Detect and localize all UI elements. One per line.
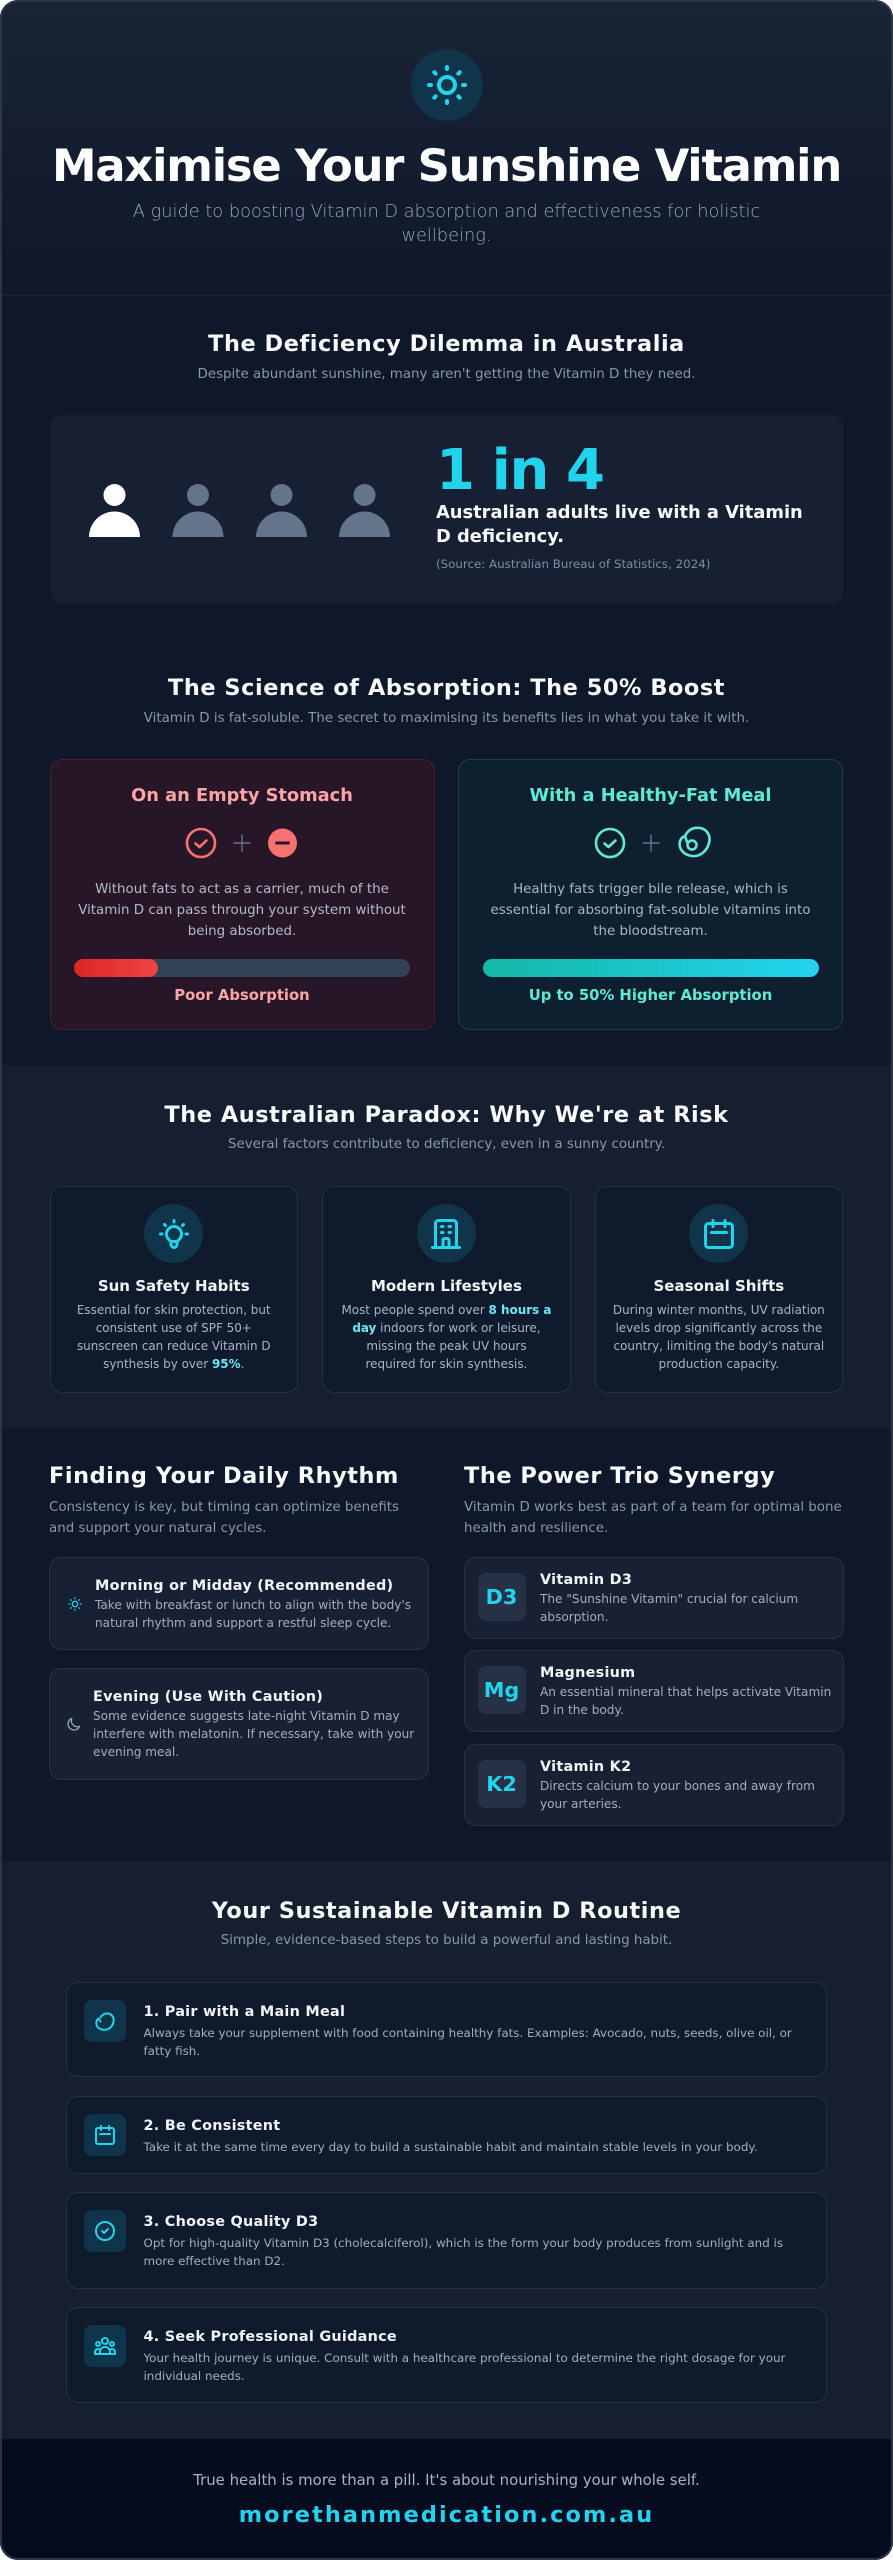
icons: vitamin plus empty stomach: [186, 828, 297, 858]
subheading: Several factors contribute to deficiency, even in a sunny country.: [228, 1137, 665, 1152]
badge: K2: [486, 1772, 517, 1796]
step text: Your health journey is unique. Consult with a healthcare professional to determine the right dosage for your: [144, 2351, 785, 2365]
icon: calendar: [689, 1204, 748, 1263]
heading: daily rhythm: Finding Your Daily Rhythm: [49, 1463, 399, 1489]
card text: Healthy fats trigger bile release, which is: [513, 882, 788, 897]
icon: four people, one highlighted: [89, 484, 390, 537]
title: Vitamin D3: [540, 1572, 632, 1588]
card heading: On an Empty Stomach: [131, 785, 353, 806]
source note: (Source: Australian Bureau of Statistics, 2024): [436, 557, 710, 571]
card: 1 in 4 statistic: [50, 415, 843, 603]
card text: production capacity.: [659, 1357, 779, 1371]
panel: header: [0, 0, 893, 295]
text: daily rhythm intro: and support your natural cycles.: [49, 1521, 266, 1536]
text: power trio intro: [464, 1500, 842, 1536]
step text: fatty fish.: [144, 2044, 200, 2058]
card: modern lifestyles: [322, 1186, 571, 1393]
step text: more effective than D2.: [144, 2254, 285, 2268]
text: evening meal.: [93, 1745, 179, 1759]
title: Vitamin K2: [540, 1759, 631, 1775]
card: magnesium: [464, 1650, 844, 1732]
step text: [144, 2026, 792, 2058]
card: healthy-fat meal: [458, 759, 843, 1030]
text: Take with breakfast or lunch to align with the body's: [95, 1598, 411, 1612]
panel: rhythm and synergy: [0, 1429, 893, 1861]
text: daily rhythm intro: [49, 1500, 399, 1536]
heading: The Science of Absorption: The 50% Boost: [168, 675, 725, 701]
progress bar: poor absorption: [74, 959, 410, 977]
card text: day indoors for work or leisure,: [352, 1321, 541, 1335]
bar label: Up to 50% Higher Absorption: [529, 987, 772, 1004]
card heading: With a Healthy-Fat Meal: [529, 785, 772, 806]
step title: 3. Choose Quality D3: [144, 2214, 318, 2230]
card text: sunscreen can reduce Vitamin D: [77, 1339, 271, 1353]
step title: 4. Seek Professional Guidance: [144, 2329, 397, 2345]
closing line: True health is more than a pill. It's about nourishing your whole self.: [193, 2471, 700, 2489]
card text: missing the peak UV hours: [366, 1339, 527, 1353]
card text: [491, 882, 810, 939]
text: power trio intro: health and resilience.: [464, 1521, 608, 1536]
panel: science of absorption: [0, 636, 893, 1065]
card text: Essential for skin protection, but: [77, 1303, 271, 1317]
step text: [144, 2236, 783, 2268]
statistic description: D deficiency.: [436, 526, 564, 547]
icon: avocado: [84, 2000, 126, 2042]
statistic description: Australian adults live with a Vitamin: [436, 502, 803, 523]
subheading: Vitamin D is fat-soluble. The secret to maximising its benefits lies in what you take it with.: [144, 711, 749, 726]
card: sun safety: [50, 1186, 298, 1393]
card text: levels drop significantly across the: [615, 1321, 822, 1335]
heading: The Australian Paradox: Why We're at Risk: [164, 1102, 729, 1128]
step 4: [66, 2307, 827, 2403]
icon: check circle: [84, 2210, 126, 2252]
subtitle: A guide to boosting Vitamin D absorption and effectiveness for holistic: [133, 201, 760, 222]
text: natural rhythm and support a restful sleep cycle.: [95, 1616, 391, 1630]
icon: moon: [67, 1718, 80, 1731]
step text: Opt for high-quality Vitamin D3 (cholecalciferol), which is the form your body produces from sunlight and is: [144, 2236, 783, 2250]
title: Evening (Use With Caution): [93, 1689, 323, 1705]
statistic number: 1 in 4: [436, 438, 604, 503]
text: power trio intro: Vitamin D works best as part of a team for optimal bone: [464, 1500, 842, 1515]
step text: individual needs.: [144, 2369, 245, 2383]
text: [93, 1709, 414, 1759]
step text: Always take your supplement with food containing healthy fats. Examples: Avocado, nuts, seeds, olive oil, or: [144, 2026, 792, 2040]
card text: consistent use of SPF 50+: [96, 1321, 252, 1335]
text: your arteries.: [540, 1797, 622, 1811]
step title: 2. Be Consistent: [144, 2118, 280, 2134]
text: [94, 1598, 411, 1630]
text: [540, 1592, 798, 1624]
text: The "Sunshine Vitamin" crucial for calcium: [540, 1592, 798, 1606]
card title: Modern Lifestyles: [371, 1277, 522, 1295]
text: [540, 1779, 815, 1811]
footer: [0, 2439, 893, 2560]
icon: small sun: [68, 1597, 82, 1611]
icon: sun in circle: [411, 49, 483, 121]
step text: Take it at the same time every day to build a sustainable habit and maintain stable levels in your body.: [144, 2140, 758, 2154]
card title: Seasonal Shifts: [653, 1277, 784, 1295]
subtitle: [133, 201, 760, 246]
text: interfere with melatonin. If necessary, take with your: [93, 1727, 414, 1741]
card: empty stomach: [50, 759, 434, 1030]
panel: deficiency dilemma: [0, 295, 893, 636]
step title: 1. Pair with a Main Meal: [144, 2004, 345, 2020]
card: seasonal shifts: [595, 1186, 843, 1393]
step 2: [66, 2096, 827, 2174]
card text: Vitamin D can pass through your system without: [78, 903, 406, 918]
bar label: Poor Absorption: [174, 987, 310, 1004]
card text: Without fats to act as a carrier, much of the: [95, 882, 389, 897]
text: absorption.: [540, 1610, 608, 1624]
card text: the bloodstream.: [593, 924, 708, 939]
heading: power trio: The Power Trio Synergy: [464, 1463, 775, 1489]
text: Directs calcium to your bones and away from: [540, 1779, 815, 1793]
card text: [613, 1303, 825, 1371]
card: vitamin D3: [464, 1557, 844, 1639]
heading: The Deficiency Dilemma in Australia: [208, 331, 685, 357]
badge: [478, 1760, 526, 1808]
text: Some evidence suggests late-night Vitamin D may: [93, 1709, 400, 1723]
badge: D3: [486, 1585, 517, 1609]
card: evening: [49, 1668, 429, 1780]
panel: sustainable routine: [0, 1861, 893, 2439]
title: Maximise Your Sunshine Vitamin: [52, 139, 841, 192]
website link: morethanmedication.com.au: [239, 2502, 654, 2528]
subtitle: wellbeing.: [401, 225, 492, 246]
text: D in the body.: [540, 1703, 624, 1717]
text: daily rhythm intro: Consistency is key, but timing can optimize benefits: [49, 1500, 399, 1515]
step 3: [66, 2192, 827, 2289]
badge: [478, 1573, 526, 1621]
card text: required for skin synthesis.: [366, 1357, 527, 1371]
card: morning: [49, 1557, 429, 1650]
card text: being absorbed.: [188, 924, 296, 939]
card text: Most people spend over 8 hours a: [341, 1303, 551, 1317]
icon: light bulb: [144, 1204, 203, 1263]
card text: During winter months, UV radiation: [613, 1303, 825, 1317]
step text: [144, 2351, 786, 2383]
subheading: Despite abundant sunshine, many aren't getting the Vitamin D they need.: [198, 367, 695, 382]
badge: [478, 1666, 526, 1714]
card text: essential for absorbing fat-soluble vitamins into: [491, 903, 810, 918]
text: An essential mineral that helps activate Vitamin: [540, 1685, 831, 1699]
icon: calendar: [84, 2114, 126, 2156]
card: vitamin K2: [464, 1744, 844, 1826]
card text: synthesis by over 95%.: [103, 1357, 244, 1371]
icon: people group: [84, 2325, 126, 2367]
progress bar: higher absorption: [483, 959, 819, 977]
card text: country, limiting the body's natural: [614, 1339, 824, 1353]
badge: Mg: [484, 1678, 519, 1702]
card title: Sun Safety Habits: [98, 1277, 250, 1295]
icons: vitamin plus avocado: [594, 826, 711, 858]
card text: [341, 1303, 551, 1371]
title: Morning or Midday (Recommended): [95, 1578, 393, 1594]
card text: [78, 882, 406, 939]
panel: Australian paradox: [0, 1065, 893, 1429]
subheading: Simple, evidence-based steps to build a powerful and lasting habit.: [221, 1933, 672, 1948]
heading: Your Sustainable Vitamin D Routine: [212, 1898, 681, 1924]
step 1: [66, 1982, 827, 2077]
card text: [77, 1303, 271, 1371]
icon: building: [417, 1204, 476, 1263]
title: Magnesium: [540, 1665, 635, 1681]
statistic description: [436, 502, 803, 547]
text: [540, 1685, 831, 1717]
